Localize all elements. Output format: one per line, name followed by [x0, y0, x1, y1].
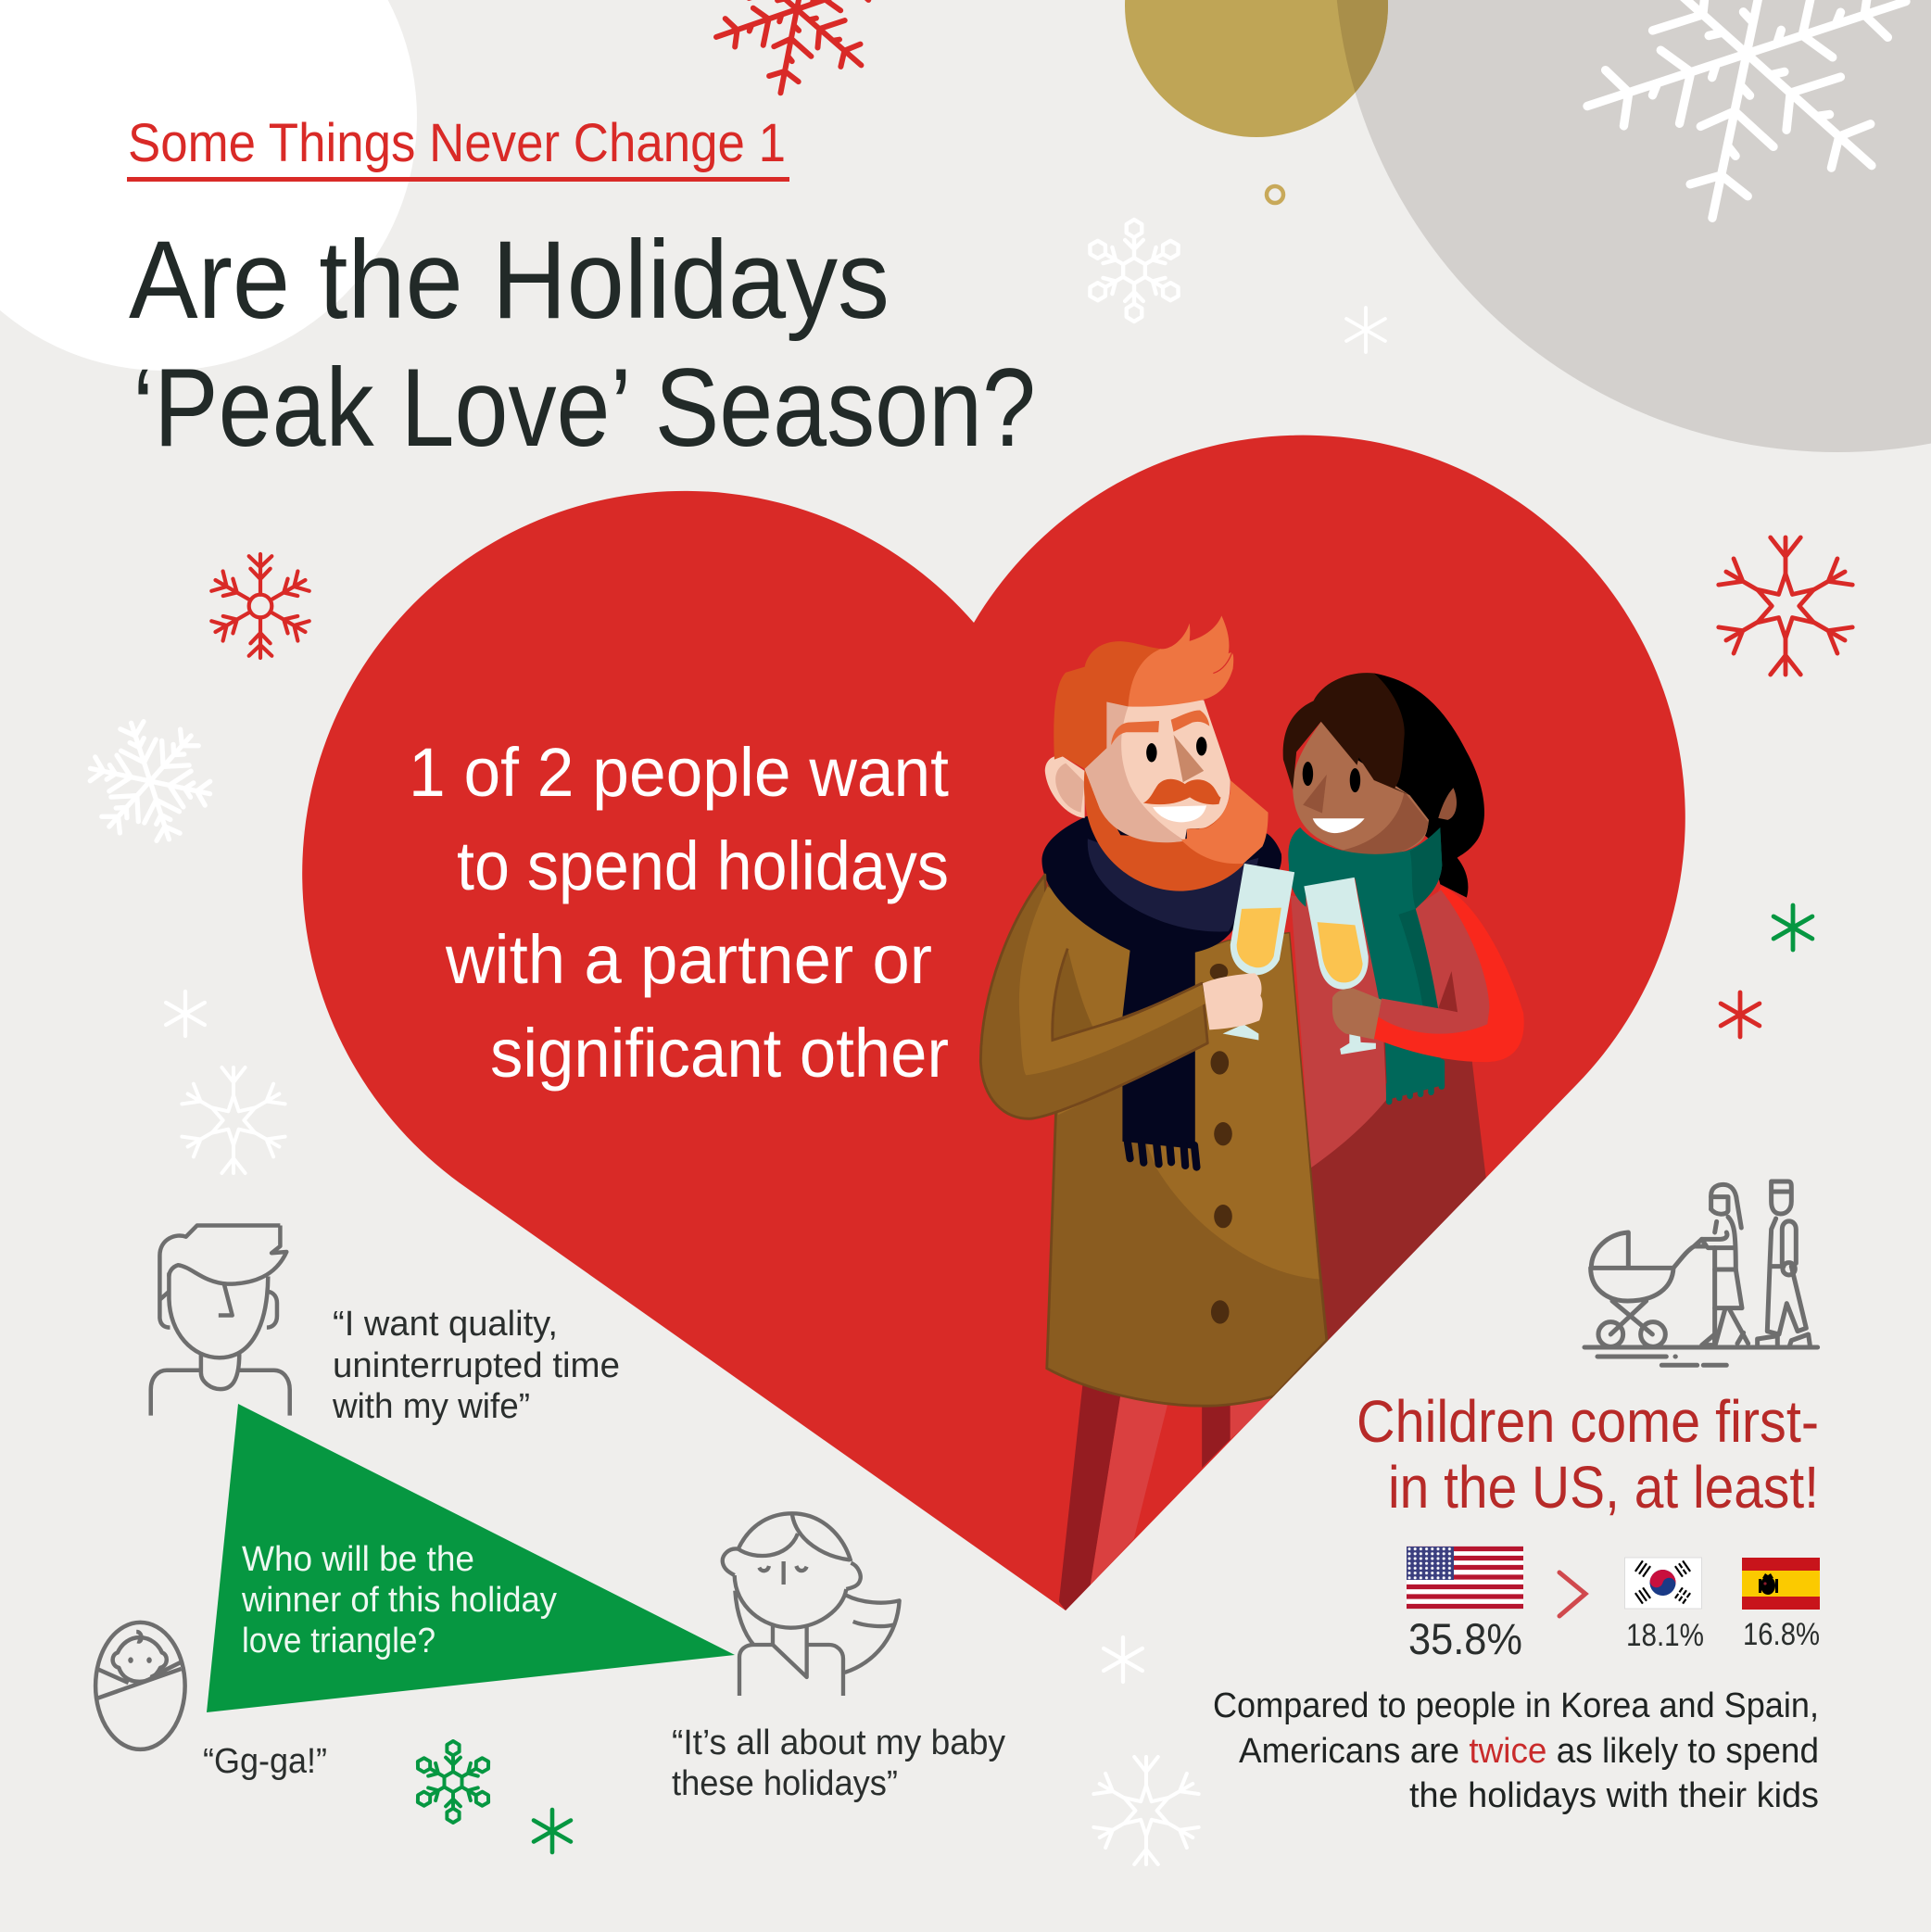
husband quote: “I want quality,	[333, 1305, 558, 1344]
decorative gray circle top right	[1334, 0, 1931, 452]
icon: family with stroller	[1584, 1181, 1818, 1365]
heart statement text: 1 of 2 people want	[409, 734, 949, 811]
icon: man line portrait	[151, 1225, 290, 1416]
green love triangle callout	[207, 1404, 735, 1712]
icon: swaddled baby	[95, 1623, 185, 1749]
icon: green asterisk right	[1773, 905, 1812, 950]
icon: white star snowflake left	[182, 1067, 285, 1173]
comparison paragraph: Compared to people in Korea and Spain,	[1213, 1686, 1819, 1725]
percentage: USA: 35.8%	[1408, 1614, 1522, 1663]
callout text: Who will be the	[242, 1540, 474, 1579]
icon: red snowflake top	[697, 0, 897, 109]
percentage: Spain: 16.8%	[1743, 1617, 1820, 1652]
comparison paragraph: the holidays with their kids	[1409, 1776, 1819, 1815]
small gold ring	[1267, 186, 1283, 203]
icon: red hub snowflake	[209, 554, 311, 658]
icon: white dense snowflake left	[72, 704, 228, 858]
children heading: in the US, at least!	[1388, 1454, 1819, 1521]
children heading: Children come first-	[1357, 1388, 1819, 1455]
icon: white asterisk bottom	[1104, 1637, 1142, 1682]
icon: red star snowflake right	[1719, 537, 1852, 675]
comparison paragraph	[1213, 1686, 1819, 1815]
heart statement text: with a partner or	[445, 921, 932, 998]
main title	[129, 218, 1036, 470]
wife quote: “It’s all about my baby	[672, 1724, 1005, 1762]
man's legs	[1059, 1383, 1278, 1610]
callout text: winner of this holiday	[241, 1581, 557, 1620]
kicker underline	[127, 177, 789, 182]
heart statement text: to spend holidays	[457, 827, 949, 904]
icon: white hexagon snowflake	[1085, 220, 1183, 322]
flag: Spain	[1742, 1558, 1820, 1610]
man's coat	[1047, 884, 1327, 1406]
icon: green asterisk bottom	[534, 1810, 571, 1852]
main title: Are the Holidays	[129, 218, 890, 342]
illustration: couple toasting	[980, 615, 1524, 1610]
husband quote	[332, 1305, 620, 1426]
man's head	[1045, 615, 1268, 891]
big red heart	[302, 436, 1685, 1610]
woman	[1283, 673, 1524, 1425]
icon: white asterisk	[1346, 308, 1385, 352]
comparison paragraph: Americans are twice as likely to spend	[1239, 1732, 1819, 1771]
callout text	[241, 1540, 557, 1661]
main title: ‘Peak Love’ Season?	[133, 346, 1036, 470]
gold ornament circle	[1125, 0, 1388, 137]
kicker heading: Some Things Never Change 1	[128, 113, 786, 173]
wife quote: these holidays”	[672, 1764, 898, 1803]
callout text: love triangle?	[242, 1622, 435, 1661]
husband quote: uninterrupted time	[333, 1346, 620, 1385]
heart statement text: significant other	[490, 1015, 949, 1092]
icon: large white snowflake top right	[1548, 0, 1931, 252]
wife quote	[672, 1724, 1005, 1803]
icon: white asterisk left	[166, 991, 205, 1036]
man's champagne glass and hand	[1203, 864, 1294, 1040]
woman's champagne glass and hand	[1304, 878, 1382, 1054]
man's sleeve	[980, 875, 1207, 1118]
children heading	[1357, 1388, 1819, 1521]
icon: white star snowflake bottom	[1093, 1757, 1199, 1864]
husband quote: with my wife”	[332, 1387, 530, 1426]
flag: USA	[1407, 1547, 1523, 1609]
heart statement text	[409, 734, 949, 1092]
icon: green hexagon snowflake	[414, 1741, 492, 1823]
decorative white circle top left	[0, 0, 417, 371]
icon: red asterisk right	[1721, 992, 1760, 1037]
man's scarf	[1041, 816, 1281, 1168]
flag: South Korea	[1625, 1558, 1701, 1609]
baby quote: “Gg-ga!”	[203, 1742, 327, 1781]
comparison chevron	[1559, 1572, 1585, 1616]
percentage: Korea: 18.1%	[1626, 1618, 1704, 1653]
icon: woman line portrait	[723, 1513, 900, 1696]
